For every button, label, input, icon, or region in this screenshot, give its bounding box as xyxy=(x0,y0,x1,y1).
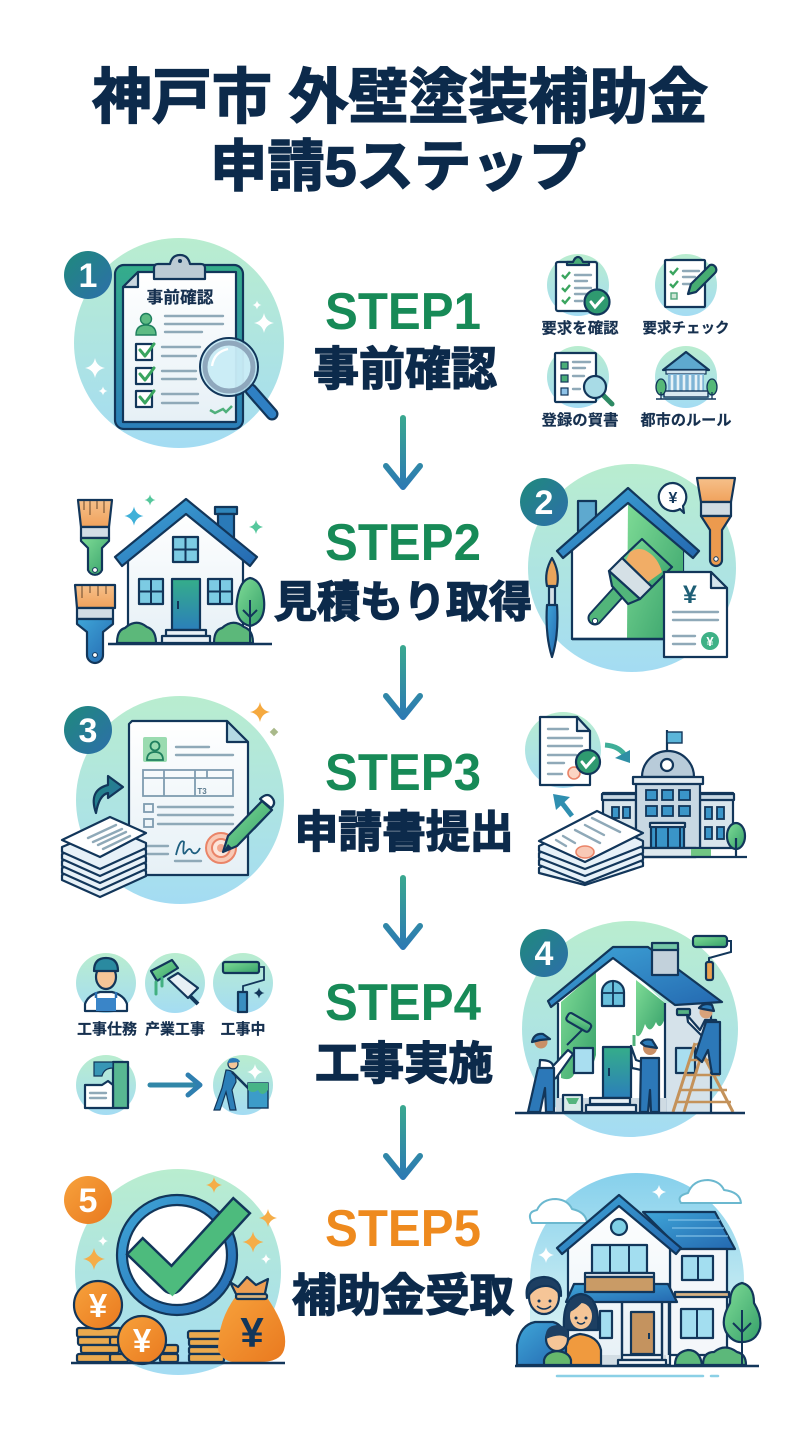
icon: estimate document xyxy=(664,572,727,657)
icon: roller xyxy=(213,953,273,1013)
icon: sparkle xyxy=(250,702,278,736)
badge: 1: 1 xyxy=(79,257,97,295)
icon: painting worker xyxy=(213,1055,273,1115)
arrow: step 1 to 2 xyxy=(386,418,420,487)
icon: registration document xyxy=(547,346,612,408)
icon: thin brush xyxy=(546,558,558,657)
icon: check ring xyxy=(117,1195,237,1315)
icon: curved arrow xyxy=(94,776,123,813)
arrow: to painting worker xyxy=(150,1075,200,1095)
icon: two-storey house xyxy=(557,1195,760,1365)
icon: city hall xyxy=(655,346,717,408)
icon: requirements confirm xyxy=(547,254,610,316)
label: 要求を確認 xyxy=(542,319,618,337)
step 5 heading xyxy=(292,1200,514,1321)
step 1 heading: STEP1 xyxy=(325,283,481,341)
icon: money bag: ¥ xyxy=(240,1309,264,1356)
icon: requirements check xyxy=(655,254,717,316)
icon: orange brush xyxy=(697,478,735,566)
panel: step 2 estimate illustration xyxy=(520,464,736,672)
icon: worker on ladder xyxy=(677,1004,720,1074)
icon: application form xyxy=(129,721,248,875)
icon: sparkles xyxy=(85,300,274,396)
title: 申請5ステップ xyxy=(210,135,586,198)
icon: paper stack xyxy=(62,817,146,897)
icon: pen xyxy=(223,795,274,852)
icon: sparkles xyxy=(124,494,263,534)
title: 神戸市 外壁塗装補助金 xyxy=(92,64,708,131)
label: 都市のルール xyxy=(640,411,732,429)
icon: coin xyxy=(118,1316,166,1364)
icon: coin: ¥ xyxy=(89,1287,108,1324)
icon: family xyxy=(517,1277,601,1365)
step 4 heading xyxy=(315,974,493,1089)
badge: 1 xyxy=(64,251,112,299)
icon: paper stack with stamp xyxy=(539,811,643,885)
badge: 2 xyxy=(520,478,568,526)
icon: city hall xyxy=(602,730,747,857)
step 5 heading: 補助金受取 xyxy=(292,1270,514,1321)
icon: sparkles xyxy=(538,1185,666,1263)
label: 要求チェック xyxy=(642,319,730,337)
step 2 heading: 見積もり取得 xyxy=(274,579,532,627)
icon: green brush xyxy=(78,500,112,575)
label: 工事仕務 xyxy=(77,1020,137,1038)
icon: yen bubble: ¥ xyxy=(669,490,678,507)
icon: house under repainting xyxy=(548,943,722,1112)
arrow: step 3 to 4 xyxy=(386,878,420,947)
step 3 heading: STEP3 xyxy=(325,744,481,802)
step 4 heading: STEP4 xyxy=(325,974,481,1032)
arrow: to city hall xyxy=(605,745,630,763)
icon: paint roller xyxy=(693,936,731,980)
badge: 5: 5 xyxy=(79,1182,97,1220)
panel: step 3 submission to city hall xyxy=(525,712,747,885)
icon: worker at door xyxy=(631,1035,659,1112)
step 3 heading: 申請書提出 xyxy=(294,808,514,857)
title xyxy=(92,64,708,198)
step 1 heading xyxy=(313,283,497,395)
badge: 4: 4 xyxy=(535,935,554,973)
icon: yen bubble xyxy=(659,483,686,513)
panel: step 4 small icons xyxy=(76,953,273,1115)
icon: estimate document: ¥ xyxy=(683,581,697,609)
arrow: back to document xyxy=(553,794,572,816)
step 4 heading: 工事実施 xyxy=(315,1038,493,1089)
icon: coin xyxy=(74,1281,122,1329)
icon: clipboard xyxy=(115,255,243,429)
icon: worker xyxy=(76,953,136,1013)
panel: step 2 house and brushes xyxy=(75,494,272,663)
panel: step 1 clipboard illustration xyxy=(64,238,284,448)
badge: 3: 3 xyxy=(79,712,97,750)
icon: magnifier xyxy=(200,338,272,414)
icon: clipboard: 事前確認 xyxy=(146,288,214,307)
panel: step 5 subsidy received xyxy=(64,1169,285,1375)
icon: checked document xyxy=(525,712,601,788)
badge: 5 xyxy=(64,1176,112,1224)
icon: paint scraper xyxy=(145,953,205,1013)
panel: step 5 family and new house xyxy=(515,1173,760,1376)
icon: house xyxy=(108,499,272,644)
icon: money bag xyxy=(218,1277,285,1362)
icon: ladder xyxy=(673,1043,733,1112)
icon: sparkles xyxy=(83,1177,277,1270)
icon: coin stacks xyxy=(77,1328,225,1362)
icon: clouds xyxy=(530,1180,741,1223)
icon: estimate document: ¥ xyxy=(706,634,714,649)
label: 登録の貿書 xyxy=(542,411,618,429)
panel: step 1 small icons xyxy=(542,254,732,429)
icon: blue brush xyxy=(75,585,115,663)
icon: application form: T3 xyxy=(197,787,207,796)
icon: large brush xyxy=(592,539,672,624)
arrow: step 2 to 3 xyxy=(386,648,420,717)
badge: 2: 2 xyxy=(535,484,553,522)
label: 产業工事 xyxy=(145,1020,205,1038)
label: 工事中 xyxy=(220,1020,266,1038)
icon: worker with roller (left) xyxy=(528,1012,592,1112)
icon: plan document xyxy=(76,1055,136,1115)
panel: step 3 application document xyxy=(62,696,284,904)
step 2 heading xyxy=(274,514,532,627)
icon: half-painted house xyxy=(557,488,699,639)
arrow: step 4 to 5 xyxy=(386,1108,420,1177)
badge: 4 xyxy=(520,929,568,977)
badge: 3 xyxy=(64,706,112,754)
step 2 heading: STEP2 xyxy=(325,514,481,572)
step 5 heading: STEP5 xyxy=(325,1200,481,1258)
panel: step 4 painting the house xyxy=(515,921,745,1137)
step 1 heading: 事前確認 xyxy=(313,343,497,395)
icon: coin: ¥ xyxy=(133,1322,152,1359)
step 3 heading xyxy=(294,744,514,857)
